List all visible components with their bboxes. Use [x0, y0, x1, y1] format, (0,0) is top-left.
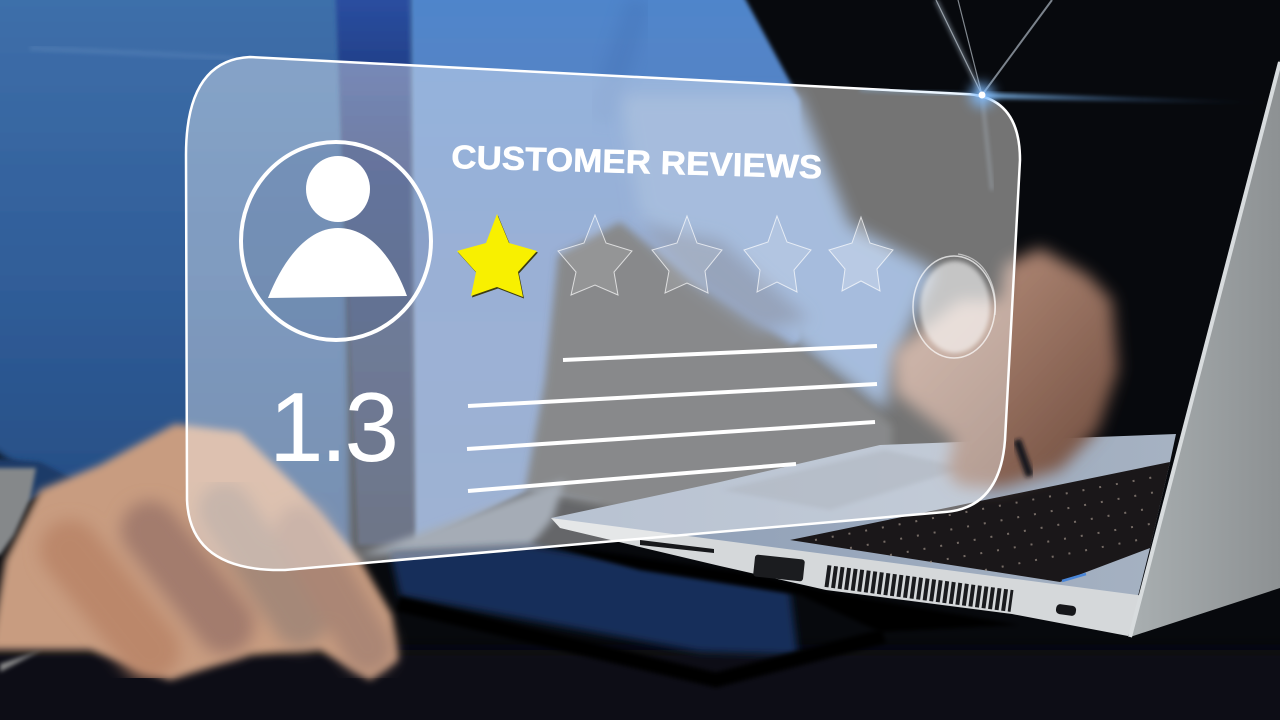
laptop	[551, 60, 1280, 637]
forearm sleeve	[620, 95, 935, 410]
screen rim	[1130, 62, 1280, 637]
shadow under laptop	[530, 540, 1020, 632]
lock port	[1055, 604, 1077, 616]
glass panel	[186, 57, 1020, 570]
table reflection	[0, 650, 42, 672]
table	[0, 650, 1280, 720]
empty star 4	[744, 216, 811, 292]
shirt	[0, 0, 935, 555]
rating score: 1.3	[269, 372, 399, 482]
empty star 5	[829, 217, 893, 291]
empty star 3	[652, 216, 722, 293]
keyboard	[790, 462, 1170, 582]
trackpad	[722, 450, 965, 510]
pen	[1017, 440, 1030, 476]
star rating	[457, 214, 893, 298]
shirt placket	[335, 0, 415, 545]
review text lines	[467, 346, 877, 491]
sleeve shadow blending into grey	[640, 225, 810, 330]
glass review card	[186, 0, 1270, 570]
laptop deck	[551, 434, 1176, 612]
dim backdrop seen through glass	[794, 86, 1018, 444]
shirt cuff	[0, 458, 75, 500]
heading: CUSTOMER REVIEWS	[451, 138, 823, 185]
usb dongle	[753, 554, 805, 582]
tablet	[390, 540, 1020, 680]
shirt pocket line	[30, 48, 235, 58]
left hand and wrist	[0, 424, 398, 680]
touch point	[913, 254, 995, 358]
hand back	[0, 424, 398, 680]
filled star	[457, 214, 538, 298]
avatar icon	[241, 142, 431, 340]
laptop screen back	[1130, 60, 1280, 637]
shirt fold highlight	[600, 0, 640, 120]
status light	[1062, 574, 1086, 581]
vent grille	[826, 576, 1012, 601]
watch	[0, 468, 36, 555]
right hand	[893, 248, 1118, 488]
sd card slot	[640, 540, 714, 553]
shirt centre	[410, 0, 800, 545]
laptop front edge	[551, 518, 1145, 636]
shirt reflection on tablet	[390, 545, 798, 655]
grey room through glass	[525, 222, 892, 510]
lower reflection streak	[360, 480, 565, 555]
left shirt panel	[0, 0, 350, 555]
empty star 2	[558, 215, 632, 295]
lens flare	[860, 0, 1270, 190]
fingers	[70, 510, 368, 650]
tablet edge	[398, 604, 884, 680]
